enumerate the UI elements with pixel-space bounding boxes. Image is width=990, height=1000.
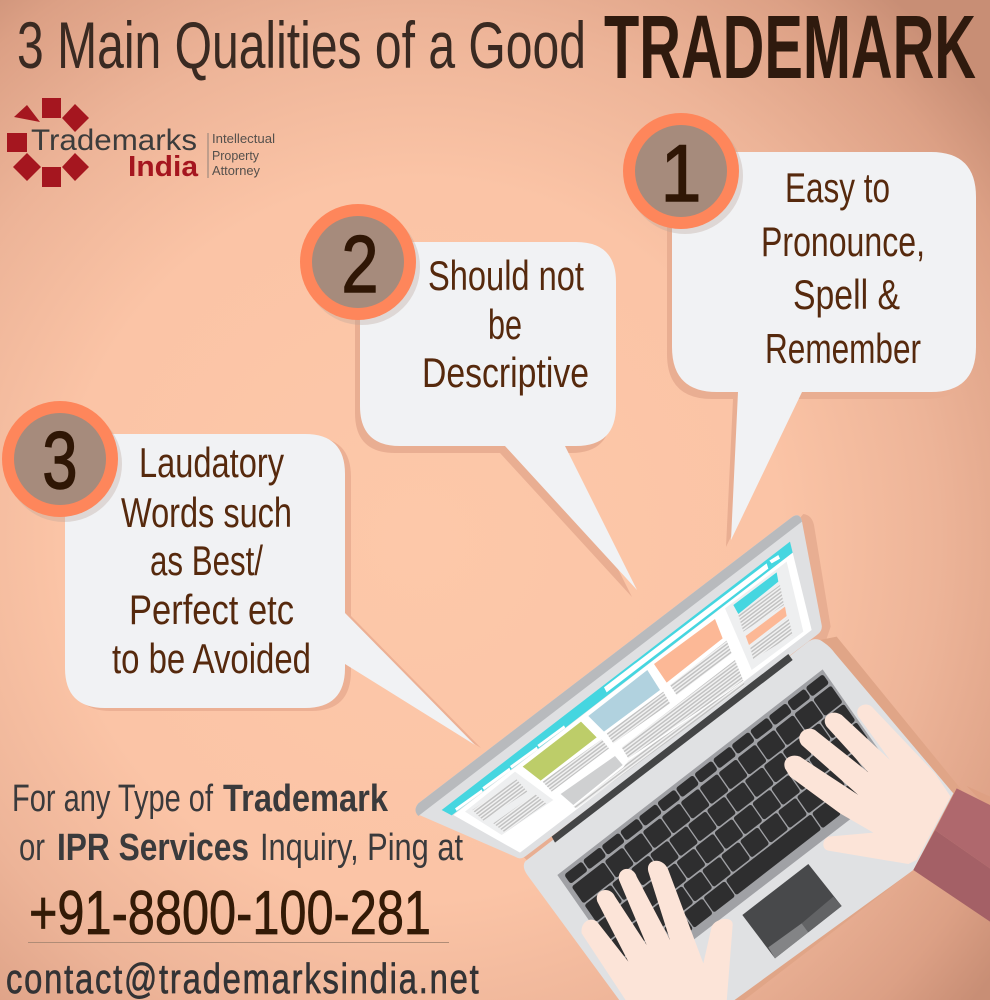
address field	[455, 555, 780, 811]
logo wordmark: India: India	[128, 151, 199, 183]
logo tagline: Attorney	[212, 163, 260, 178]
logo wordmark: Trademarks: Trademarks	[31, 124, 197, 157]
logo tagline	[212, 131, 275, 178]
article card: green	[523, 722, 597, 781]
speech bubble 3	[65, 434, 481, 748]
quality 3 text: to be Avoided	[112, 635, 311, 682]
browser bar	[442, 542, 793, 815]
quality 1 text: Pronounce,	[761, 218, 925, 265]
trackpad	[742, 864, 842, 958]
logo: Trademarks India	[7, 98, 275, 187]
keyboard	[557, 669, 900, 985]
right hand	[784, 705, 951, 864]
inquiry line 2: or	[19, 827, 45, 869]
logo mark: ring of red squares	[7, 98, 89, 187]
inquiry line 2: IPR Services	[57, 827, 249, 869]
number badge 2	[300, 204, 420, 325]
inquiry line 1: Trademark	[223, 778, 389, 820]
number badge 3: 3	[42, 416, 78, 506]
number badge 2: 2	[342, 219, 378, 309]
laptop	[415, 514, 990, 1000]
inquiry line 1	[12, 778, 389, 820]
quality 3 text: as Best/	[150, 537, 263, 584]
quality 3 text	[112, 439, 311, 682]
sleeve	[913, 786, 990, 922]
screen display	[453, 553, 812, 853]
screen bezel	[416, 515, 822, 858]
laptop base	[524, 637, 962, 1000]
article card: wide	[622, 660, 743, 758]
phone number: +91-8800-100-281	[29, 879, 431, 948]
left hand	[582, 861, 733, 1000]
quality 2 text	[422, 252, 589, 396]
hinge bar	[552, 654, 793, 843]
speech bubble 2	[355, 242, 637, 597]
sidebar	[725, 562, 803, 670]
contact block	[6, 778, 479, 1000]
number badge 3	[2, 401, 122, 522]
inquiry line 2: Inquiry, Ping at	[260, 827, 463, 869]
quality 3 text: Laudatory	[139, 439, 284, 486]
quality 1 text	[761, 164, 925, 372]
number badge 1	[623, 113, 743, 234]
quality 1 text: Remember	[765, 325, 921, 372]
quality 1 text: Easy to	[785, 164, 890, 211]
logo tagline: Intellectual	[212, 131, 275, 146]
keyboard well	[557, 669, 900, 985]
quality 1 text: Spell &	[793, 271, 900, 318]
quality 2 text: Descriptive	[422, 349, 589, 396]
article card: orange	[654, 619, 723, 683]
quality 2 text: Should not	[428, 252, 584, 299]
logo tagline: Property	[212, 148, 259, 163]
inquiry line 2	[19, 827, 463, 869]
quality 3 text: Perfect etc	[129, 586, 294, 633]
left card	[465, 772, 553, 835]
laptop screen	[415, 514, 831, 860]
quality 2 text: be	[488, 301, 522, 348]
title line: 3 Main Qualities of a Good: 3 Main Qualities of a Good	[17, 8, 586, 82]
hands and sleeve	[582, 705, 990, 1000]
inquiry line 1: For any Type of	[12, 778, 213, 820]
speech bubble 1	[667, 152, 976, 547]
title	[17, 0, 976, 98]
number badge 1: 1	[661, 128, 701, 219]
quality 3 text: Words such	[121, 489, 292, 536]
article card: blue	[588, 670, 660, 732]
